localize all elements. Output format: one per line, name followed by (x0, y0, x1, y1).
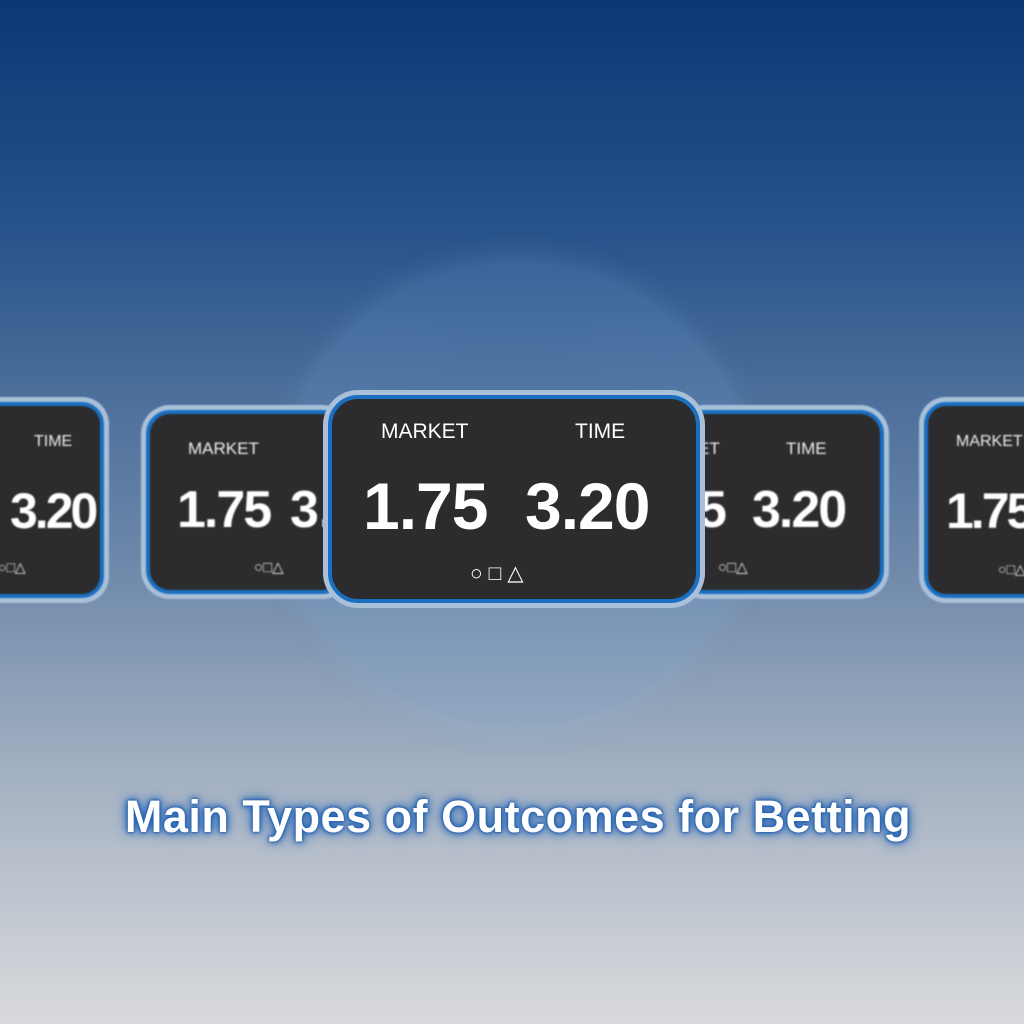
card: right: ET (698, 439, 720, 458)
card: far left: TIME (34, 433, 72, 450)
card: right: TIME (786, 439, 827, 458)
card: center (328, 395, 700, 603)
card: left: 3. (290, 481, 333, 539)
card: left (146, 410, 346, 594)
card: left: MARKET (188, 439, 259, 458)
card: center: TIME (575, 420, 625, 443)
card: far left (0, 402, 104, 598)
glow rings (282, 262, 752, 727)
labels: MARKET (381, 420, 469, 443)
card: left: ○□△ (254, 559, 284, 576)
card: left: 1.75 (177, 481, 270, 539)
odds: 1.75 (363, 469, 487, 543)
card: far left: 3.20 (10, 483, 95, 539)
card: right: 5 (698, 481, 727, 539)
card: right (680, 410, 884, 594)
card: far right: MARKET (956, 433, 1023, 450)
card: center: 3.20 (525, 469, 649, 543)
icons: ○□△ (470, 562, 530, 585)
title: Main Types of Outcomes for Betting (125, 791, 911, 842)
card: right: 3.20 (752, 481, 845, 539)
card: far right (924, 402, 1024, 598)
card: right: ○□△ (718, 559, 748, 576)
